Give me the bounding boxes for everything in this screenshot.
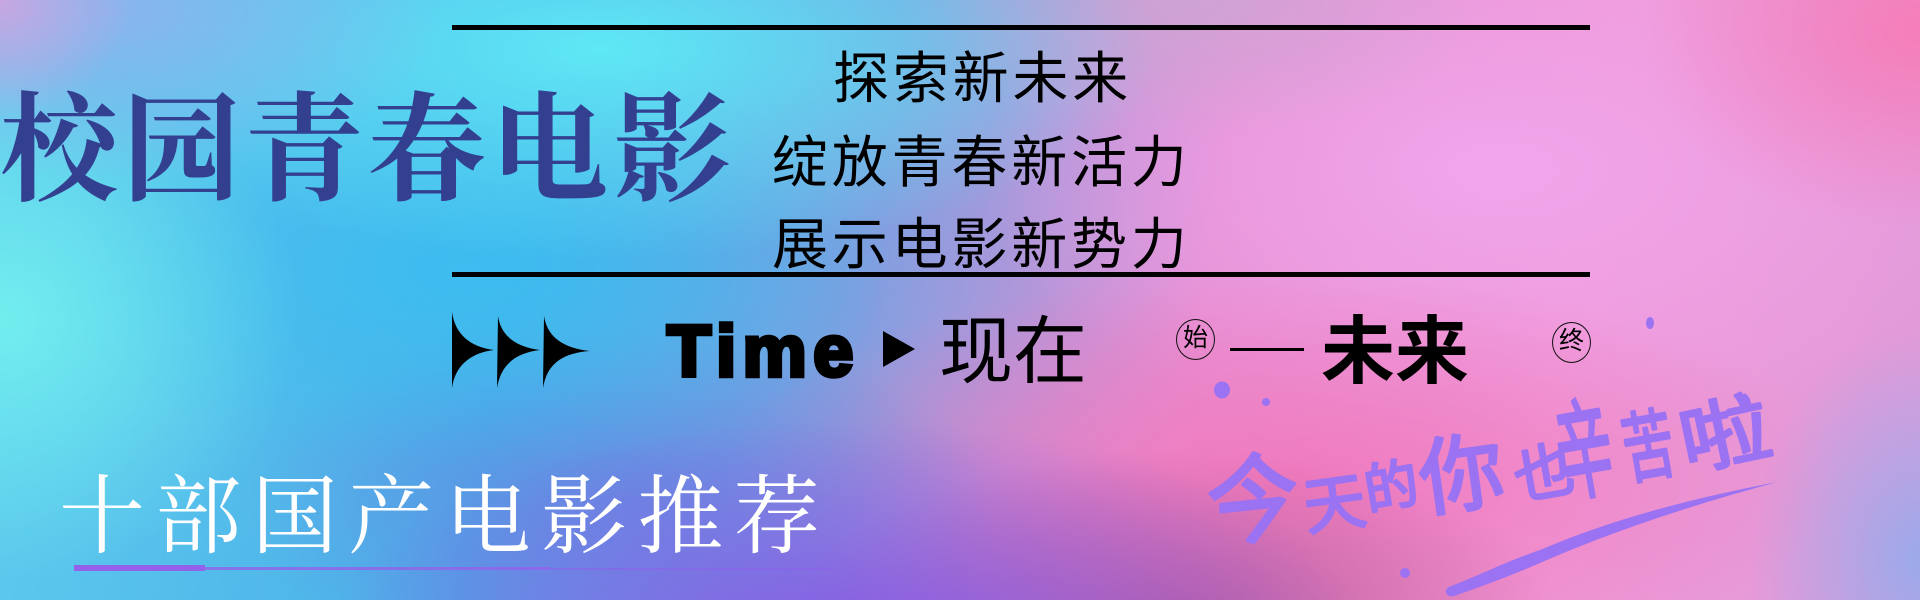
subtitle: 十部国产电影推荐: [59, 469, 830, 565]
handwritten note: 辛: [1542, 361, 1624, 524]
ink dots: [1214, 317, 1753, 578]
handwritten note: 啦: [1668, 366, 1780, 492]
start label: 现在: [939, 310, 1087, 393]
start badge: [1176, 319, 1215, 360]
bottom rule: [452, 272, 1590, 277]
tagline block: [772, 47, 1191, 276]
end badge: 终: [1559, 327, 1584, 355]
start badge: 始: [1183, 324, 1208, 352]
dash: [1230, 348, 1304, 351]
tagline 1: 探索新未来: [833, 47, 1132, 110]
time label: Time: [667, 312, 860, 392]
icon: triple arrowhead: [452, 312, 590, 388]
handwritten note: 你: [1411, 403, 1511, 535]
end label: 未来: [1321, 310, 1469, 393]
icon: play triangle: [883, 331, 915, 367]
tagline 3: 展示电影新势力: [772, 213, 1191, 276]
subtitle underline: [74, 565, 776, 571]
handwritten note: 苦: [1612, 381, 1682, 500]
tagline 2: 绽放青春新活力: [772, 131, 1191, 194]
end badge: [1552, 322, 1591, 363]
brush stroke: [1446, 482, 1777, 596]
handwritten note: 天: [1297, 450, 1371, 548]
top rule: [452, 25, 1590, 30]
main title: 校园青春电影: [0, 86, 736, 217]
handwritten note: 的: [1357, 439, 1424, 526]
handwritten note: 也: [1506, 421, 1580, 517]
handwritten note: 今: [1204, 418, 1300, 569]
